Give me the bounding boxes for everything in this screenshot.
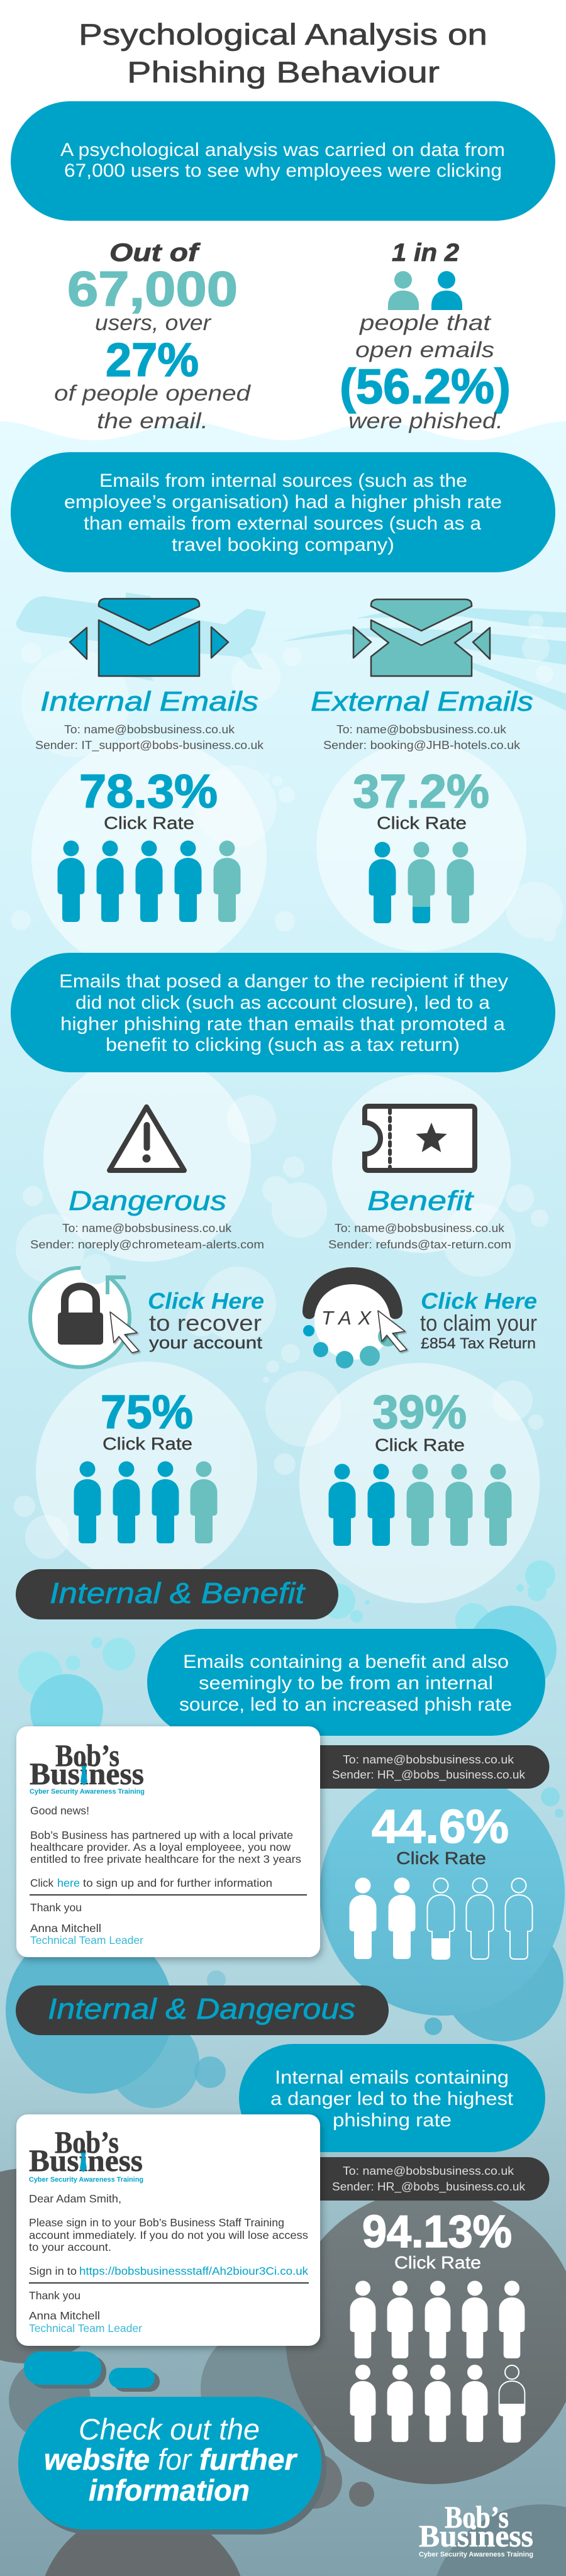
- stat circle: internal and benefit: [302, 1745, 565, 2016]
- panel: internal vs external explanation: Emails from internal sources (such as the: [99, 470, 467, 491]
- address pill: [302, 2157, 550, 2201]
- panel: dangerous vs benefit explanation: [11, 953, 555, 1072]
- internal email addresses: Sender: IT_support@bobs-business.co.uk: [35, 739, 264, 752]
- stat circle: internal and dangerous: [286, 2157, 566, 2484]
- stat: out of 67,000 users: of people opened: [54, 381, 252, 406]
- background plane and streaks: [16, 592, 566, 711]
- stat: benefit click rate: [328, 1385, 512, 1546]
- stat: benefit click rate: Click Rate: [375, 1435, 465, 1455]
- heading: external emails: External Emails: [311, 686, 533, 717]
- icon: warning triangle: [109, 1107, 184, 1170]
- icon: internal envelope: [70, 599, 228, 676]
- pictogram: benefit people: [328, 1464, 512, 1546]
- email body: to sign up and for further information: [83, 1877, 272, 1889]
- email body: Technical Team Leader: [29, 2322, 142, 2334]
- benefit email addresses: [328, 1222, 511, 1251]
- stat: internal click rate: Click Rate: [104, 813, 194, 833]
- email body: Dear Adam Smith,: [29, 2192, 121, 2205]
- email card: benefit example: [16, 1726, 320, 1957]
- panel: internal vs external explanation: employee’s organisation) had a higher phish rate: [64, 492, 502, 513]
- email card: dangerous example: [16, 2114, 320, 2346]
- email body: Technical Team Leader: [30, 1934, 143, 1946]
- callout: recover account: [148, 1288, 264, 1352]
- stat: 1 in 2 phished: 1 in 2: [392, 239, 459, 267]
- call to action: Check out the: [79, 2412, 260, 2446]
- call to action: further: [199, 2443, 298, 2476]
- logo: Cyber Security Awareness Training: [29, 2176, 143, 2184]
- address pill: To: name@bobsbusiness.co.uk: [343, 2165, 514, 2177]
- pictogram: people 44.6 percent: [350, 1878, 532, 1959]
- call to action: [18, 2397, 326, 2534]
- icon: tax badge: [302, 1267, 407, 1368]
- stat circle: internal and benefit: 44.6%: [372, 1800, 509, 1853]
- callout: claim tax return: Click Here: [421, 1288, 537, 1314]
- email body: entitled to free private healthcare for the next 3 years: [30, 1853, 301, 1865]
- stat: out of 67,000 users: 27%: [106, 333, 199, 386]
- stat: 1 in 2 phished: people that: [359, 311, 492, 335]
- pictogram: external people: [369, 841, 474, 923]
- stat: external click rate: Click Rate: [377, 813, 467, 833]
- internal email addresses: To: name@bobsbusiness.co.uk: [64, 723, 235, 736]
- email body: healthcare provider. As a loyal employeee, you now: [30, 1841, 291, 1853]
- logo: footer: Cyber Security Awareness Training: [419, 2551, 533, 2558]
- stat: internal click rate: 78.3%: [79, 765, 218, 818]
- email body: Please sign in to your Bob’s Business Staff Training: [29, 2216, 284, 2229]
- panel: dangerous vs benefit explanation: Emails that posed a danger to the recipient if they: [59, 971, 508, 992]
- email body: Bob’s Business has partnered up with a local private: [30, 1829, 293, 1841]
- dangerous email addresses: To: name@bobsbusiness.co.uk: [62, 1222, 232, 1235]
- title: Phishing Behaviour: [127, 55, 440, 89]
- callout: recover account: Click Here: [148, 1288, 264, 1314]
- title: [79, 18, 487, 89]
- stat: internal click rate: [58, 765, 240, 922]
- address pill: To: name@bobsbusiness.co.uk: [343, 1753, 514, 1766]
- panel: internal and dangerous explanation: phishing rate: [333, 2110, 452, 2131]
- stat circle: internal and benefit: Click Rate: [396, 1848, 486, 1868]
- panel: dangerous vs benefit explanation: did not click (such as account closure), led to a: [75, 992, 490, 1013]
- external email addresses: To: name@bobsbusiness.co.uk: [336, 723, 507, 736]
- heading pill: internal and dangerous: [16, 1985, 389, 2035]
- callout: recover account: to recover: [149, 1310, 262, 1336]
- panel: internal and dangerous explanation: [239, 2044, 545, 2152]
- logo: [29, 2124, 143, 2184]
- dangerous email addresses: Sender: noreply@chrometeam-alerts.com: [30, 1238, 264, 1251]
- heading: internal emails: Internal Emails: [40, 686, 258, 717]
- icon: two people: [388, 271, 462, 310]
- stat: benefit click rate: 39%: [372, 1385, 467, 1438]
- external email addresses: Sender: booking@JHB-hotels.co.uk: [323, 739, 521, 752]
- intro panel: 67,000 users to see why employees were clicking: [64, 160, 502, 181]
- email body: Click: [30, 1877, 53, 1889]
- pictogram: internal people: [58, 840, 240, 922]
- pictogram: people 94.13 percent: [350, 2280, 524, 2442]
- email body: to your account.: [29, 2241, 111, 2253]
- heading pill: internal and dangerous: Internal & Dangerous: [48, 1992, 355, 2025]
- call to action: for: [158, 2443, 192, 2476]
- decorative bubble pills: [24, 2351, 160, 2392]
- panel: internal vs external explanation: travel booking company): [172, 535, 394, 555]
- callout: recover account: your account: [149, 1333, 263, 1352]
- stat: out of 67,000 users: [54, 239, 252, 433]
- email body: Good news!: [30, 1804, 89, 1817]
- pictogram: dangerous people: [74, 1462, 218, 1543]
- icon: external envelope: [353, 599, 490, 676]
- email body: https://bobsbusinessstaff/Ah2biour3Ci.co.uk: [79, 2265, 308, 2277]
- panel: internal vs external explanation: than emails from external sources (such as a: [84, 513, 481, 534]
- stat: 1 in 2 phished: open emails: [355, 338, 494, 362]
- panel: internal and benefit explanation: seemingly to be from an internal: [199, 1673, 493, 1694]
- title: Psychological Analysis on: [79, 18, 487, 51]
- stat: dangerous click rate: Click Rate: [103, 1434, 192, 1453]
- logo: [30, 1738, 145, 1796]
- stat circle: internal and dangerous: 94.13%: [362, 2207, 512, 2257]
- panel: internal and dangerous explanation: a danger led to the highest: [270, 2089, 514, 2109]
- stat: 1 in 2 phished: (56.2%): [340, 358, 511, 414]
- logo: Cyber Security Awareness Training: [30, 1788, 145, 1796]
- stat: out of 67,000 users: users, over: [95, 311, 211, 335]
- external email addresses: [323, 723, 521, 752]
- panel: internal and benefit explanation: Emails containing a benefit and also: [183, 1652, 509, 1672]
- callout: claim tax return: £854 Tax Return: [421, 1335, 536, 1352]
- stat: dangerous click rate: 75%: [101, 1385, 193, 1438]
- logo: Bob’s: [55, 1738, 119, 1773]
- stat: 1 in 2 phished: were phished.: [348, 409, 503, 433]
- intro panel: [11, 101, 555, 221]
- stat: out of 67,000 users: 67,000: [67, 261, 238, 316]
- panel: dangerous vs benefit explanation: benefit to clicking (such as a tax return): [106, 1035, 460, 1055]
- panel: internal and benefit explanation: source, led to an increased phish rate: [179, 1694, 512, 1715]
- address pill: Sender: HR_@bobs_business.co.uk: [332, 1768, 526, 1782]
- heading: benefit: Benefit: [367, 1185, 474, 1216]
- heading pill: internal and benefit: Internal & Benefit: [50, 1577, 306, 1609]
- heading: dangerous: Dangerous: [69, 1185, 226, 1216]
- benefit email addresses: To: name@bobsbusiness.co.uk: [335, 1222, 505, 1235]
- callout: claim tax return: to claim your: [420, 1310, 537, 1336]
- logo: footer: [419, 2499, 533, 2558]
- icon: padlock with recovery ring: [30, 1254, 139, 1367]
- address pill: Sender: HR_@bobs_business.co.uk: [332, 2180, 526, 2194]
- internal email addresses: [35, 723, 264, 752]
- email body: Sign in to: [29, 2265, 77, 2277]
- background bubbles: [0, 614, 566, 2576]
- stat circle: internal and dangerous: Click Rate: [394, 2253, 481, 2272]
- panel: internal vs external explanation: [11, 452, 555, 572]
- callout: claim tax return: [420, 1288, 537, 1352]
- stat: dangerous click rate: [74, 1385, 218, 1543]
- email body: [29, 2192, 309, 2334]
- logo: footer: Bob’s: [445, 2499, 509, 2534]
- panel: internal and dangerous explanation: Internal emails containing: [275, 2067, 509, 2088]
- stat: external click rate: 37.2%: [353, 765, 489, 818]
- call to action: website: [44, 2443, 150, 2476]
- stat: out of 67,000 users: Out of: [109, 239, 201, 267]
- email body: here: [57, 1877, 80, 1889]
- logo: Bob’s: [55, 2124, 119, 2160]
- heading pill: internal and benefit: [16, 1569, 338, 1619]
- intro panel: A psychological analysis was carried on data from: [60, 140, 505, 160]
- icon: ticket with star: [365, 1106, 475, 1170]
- stat: 1 in 2 phished: [340, 239, 511, 433]
- logo: footer: Business: [419, 2518, 533, 2553]
- dangerous email addresses: [30, 1222, 264, 1251]
- address pill: [302, 1745, 550, 1789]
- email body: account immediately. If you do not you will lose access: [29, 2229, 308, 2241]
- icon: tax badge: TAX: [321, 1307, 372, 1329]
- email body: Anna Mitchell: [30, 1922, 101, 1935]
- stat: out of 67,000 users: the email.: [97, 409, 208, 433]
- email body: Thank you: [30, 1901, 82, 1914]
- panel: dangerous vs benefit explanation: higher phishing rate than emails that promoted a: [60, 1014, 505, 1035]
- email body: Thank you: [29, 2289, 80, 2302]
- call to action: information: [89, 2473, 250, 2507]
- benefit email addresses: Sender: refunds@tax-return.com: [328, 1238, 511, 1251]
- email body: Anna Mitchell: [29, 2309, 100, 2322]
- stat: external click rate: [353, 765, 489, 923]
- panel: internal and benefit explanation: [147, 1629, 545, 1736]
- logo: Business: [29, 2143, 143, 2178]
- email body: [30, 1804, 307, 1946]
- logo: Business: [30, 1756, 144, 1791]
